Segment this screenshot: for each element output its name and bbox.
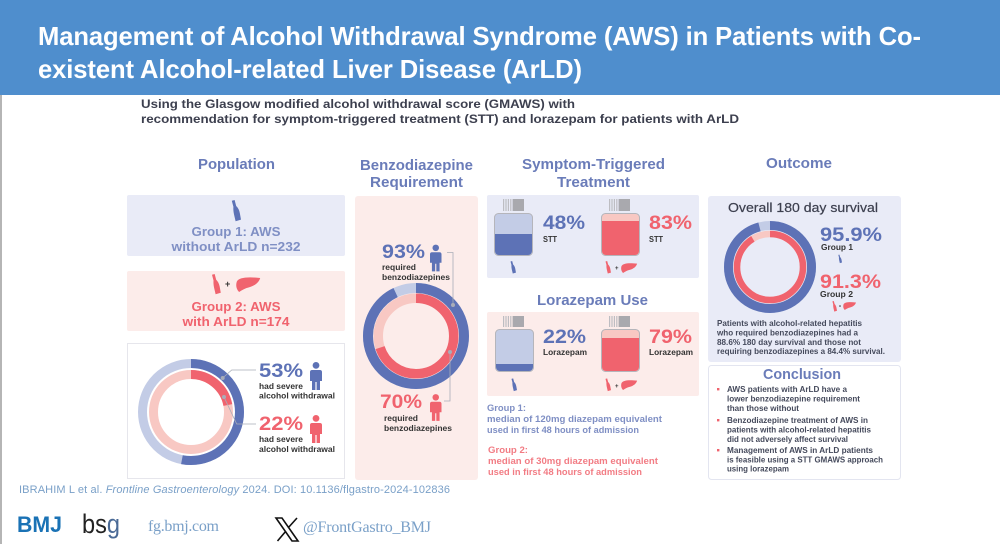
- stat: 53 percent: alcohol withdrawal: [259, 392, 335, 400]
- heading: symptom-triggered treatment: Symptom-Triggered: [522, 156, 665, 173]
- stat: group 1 survival: [820, 225, 882, 263]
- heading: population: Population: [198, 156, 275, 173]
- bullet 1: AWS patients with ArLD have a: [727, 385, 847, 394]
- logo: bsg: bsg: [82, 509, 120, 539]
- stat: 53 percent: [259, 361, 335, 400]
- label: STT: STT: [649, 235, 663, 244]
- donut chart: severe withdrawal: [142, 364, 240, 460]
- stat: 22 percent: [259, 414, 335, 454]
- survival note: 88.6% 180 day survival and those not: [717, 338, 861, 347]
- bullet 2: patients with alcohol-related hepatitis: [727, 426, 871, 434]
- heading: outcome: Outcome: [766, 155, 832, 172]
- icon: X logo: [276, 518, 298, 541]
- survival note: requiring benzodiazepines a 84.4% survival.: [717, 347, 885, 356]
- citation: IBRAHIM L et al. Frontline Gastroenterology 2024. DOI: 10.1136/flgastro-2024-102836: [19, 484, 450, 496]
- bullet 1: lower benzodiazepine requirement: [727, 394, 860, 404]
- note: group 1 dose: median of 120mg diazepam equivalent: [487, 414, 662, 424]
- link: journal website: fg.bmj.com: [148, 518, 220, 535]
- column: treatment: [487, 156, 699, 477]
- note: group 2 dose: Group 2:: [488, 445, 528, 455]
- bullet 3: is feasible using a STT GMAWS approach: [727, 456, 883, 464]
- stat: 53 percent: 53%: [259, 361, 303, 382]
- heading: lorazepam use: Lorazepam Use: [537, 292, 648, 309]
- heading: benzodiazepine requirement: Requirement: [370, 174, 463, 191]
- group 1 label: Group 1: AWS: [192, 225, 280, 239]
- stat: 22 percent: had severe: [259, 435, 304, 444]
- stat: 22 percent: alcohol withdrawal: [259, 445, 335, 454]
- stat: 93 percent: benzodiazepines: [382, 273, 451, 282]
- survival note: Patients with alcohol-related hepatitis: [717, 319, 862, 328]
- stat: 70 percent: 70%: [380, 392, 422, 413]
- label: STT: STT: [543, 235, 557, 244]
- note: group 2 dose: used in first 48 hours of admission: [488, 467, 642, 477]
- column: benzodiazepine requirement: [355, 157, 478, 480]
- title: existent Alcohol-related Liver Disease (ArLD): [38, 56, 582, 84]
- stat: 70 percent: [380, 392, 453, 433]
- icon: bottle plus liver: +: [225, 279, 230, 289]
- stat: group 1 survival: Group 1: [821, 243, 854, 252]
- label: lorazepam: Lorazepam: [543, 348, 587, 357]
- panel: lorazepam use: [487, 312, 699, 396]
- stat: 83 percent: 83%: [649, 213, 692, 234]
- donut chart: benzodiazepine: [368, 288, 464, 384]
- note: group 1 dose: used in first 48 hours of admission: [487, 425, 639, 435]
- panel heading: survival: Overall 180 day survival: [728, 200, 878, 215]
- header banner: [0, 0, 1000, 95]
- panel: conclusion: [708, 366, 900, 480]
- bullet 3: [717, 446, 883, 474]
- stat: group 2 survival: Group 2: [820, 290, 854, 299]
- stat: 93 percent: 93%: [382, 242, 425, 263]
- icon: vial 83 percent: [602, 199, 640, 256]
- group 1 label: without ArLD n=232: [170, 240, 301, 254]
- stat: 22 percent: 22%: [543, 327, 586, 348]
- stat: 70 percent: benzodiazepines: [384, 424, 453, 433]
- heading: benzodiazepine requirement: Benzodiazepine: [360, 157, 473, 174]
- bullet 2: Benzodiazepine treatment of AWS in: [727, 416, 868, 425]
- left edge strip: [0, 95, 2, 544]
- connector lines: [444, 252, 455, 401]
- note: group 2 dose: median of 30mg diazepam equivalent: [488, 456, 658, 466]
- logo: BMJ: BMJ: [17, 512, 62, 537]
- icon: bottle plus liver: +: [615, 266, 619, 272]
- stat: 93 percent: [382, 242, 451, 282]
- label: lorazepam: Lorazepam: [649, 348, 693, 357]
- stat: 22 percent: 22%: [259, 414, 303, 435]
- note: group 1 dose: Group 1:: [487, 403, 526, 413]
- subtitle: recommendation for symptom-triggered treatment (STT) and lorazepam for patients with ArLD: [141, 112, 739, 126]
- bullet 3: using lorazepam: [727, 464, 789, 474]
- donut chart: survival: [728, 226, 812, 308]
- panel: severe withdrawal: [128, 344, 344, 478]
- panel: group 1: [127, 195, 345, 256]
- icon: bottle: [511, 261, 516, 274]
- icon: vial 79 percent: [602, 316, 640, 372]
- heading: symptom-triggered treatment: Treatment: [557, 174, 630, 191]
- title: Management of Alcohol Withdrawal Syndrome (AWS) in Patients with Co-: [38, 23, 921, 51]
- panel: group 2: [127, 271, 345, 331]
- stat: 70 percent: required: [384, 414, 418, 423]
- icon: bottle plus liver: +: [615, 384, 619, 390]
- icon: bottle plus liver: [212, 274, 260, 294]
- bullet 1: than those without: [727, 404, 799, 413]
- bullet 2: did not adversely affect survival: [727, 435, 848, 444]
- icon: bottle: [511, 378, 517, 391]
- panel: benzodiazepine: [355, 196, 478, 480]
- group 2 label: Group 2: AWS: [192, 300, 280, 314]
- subtitle: Using the Glasgow modified alcohol withdrawal score (GMAWS) with: [141, 97, 575, 111]
- icon: vial 22 percent: [496, 316, 534, 372]
- bullet 2: [717, 416, 871, 444]
- survival note: who required benzodiazepines had a: [716, 328, 858, 338]
- panel: symptom-triggered treatment: [487, 195, 699, 278]
- heading: conclusion: Conclusion: [763, 366, 841, 383]
- stat: group 1 survival: 95.9%: [820, 225, 882, 246]
- column: outcome: [708, 155, 901, 480]
- column: population: [127, 156, 345, 478]
- stat: 79 percent: 79%: [649, 327, 692, 348]
- stat: group 2 survival: [820, 272, 881, 312]
- icon: bottle plus liver: [606, 261, 637, 274]
- group 2 label: with ArLD n=174: [181, 315, 290, 329]
- stat: 48 percent: 48%: [543, 213, 585, 234]
- icon: bottle: [232, 200, 241, 221]
- stat: 53 percent: had severe: [259, 382, 304, 391]
- social handle: @FrontGastro_BMJ: [303, 519, 431, 536]
- panel: outcome: [708, 196, 901, 362]
- icon: vial 48 percent: [494, 199, 532, 256]
- bullet 3: Management of AWS in ArLD patients: [727, 446, 873, 455]
- stat: 93 percent: required: [382, 263, 416, 272]
- icon: bottle plus liver: [605, 378, 637, 391]
- bullet 1: [717, 385, 860, 413]
- connector lines: [221, 370, 256, 424]
- stat: group 2 survival: 91.3%: [820, 272, 881, 293]
